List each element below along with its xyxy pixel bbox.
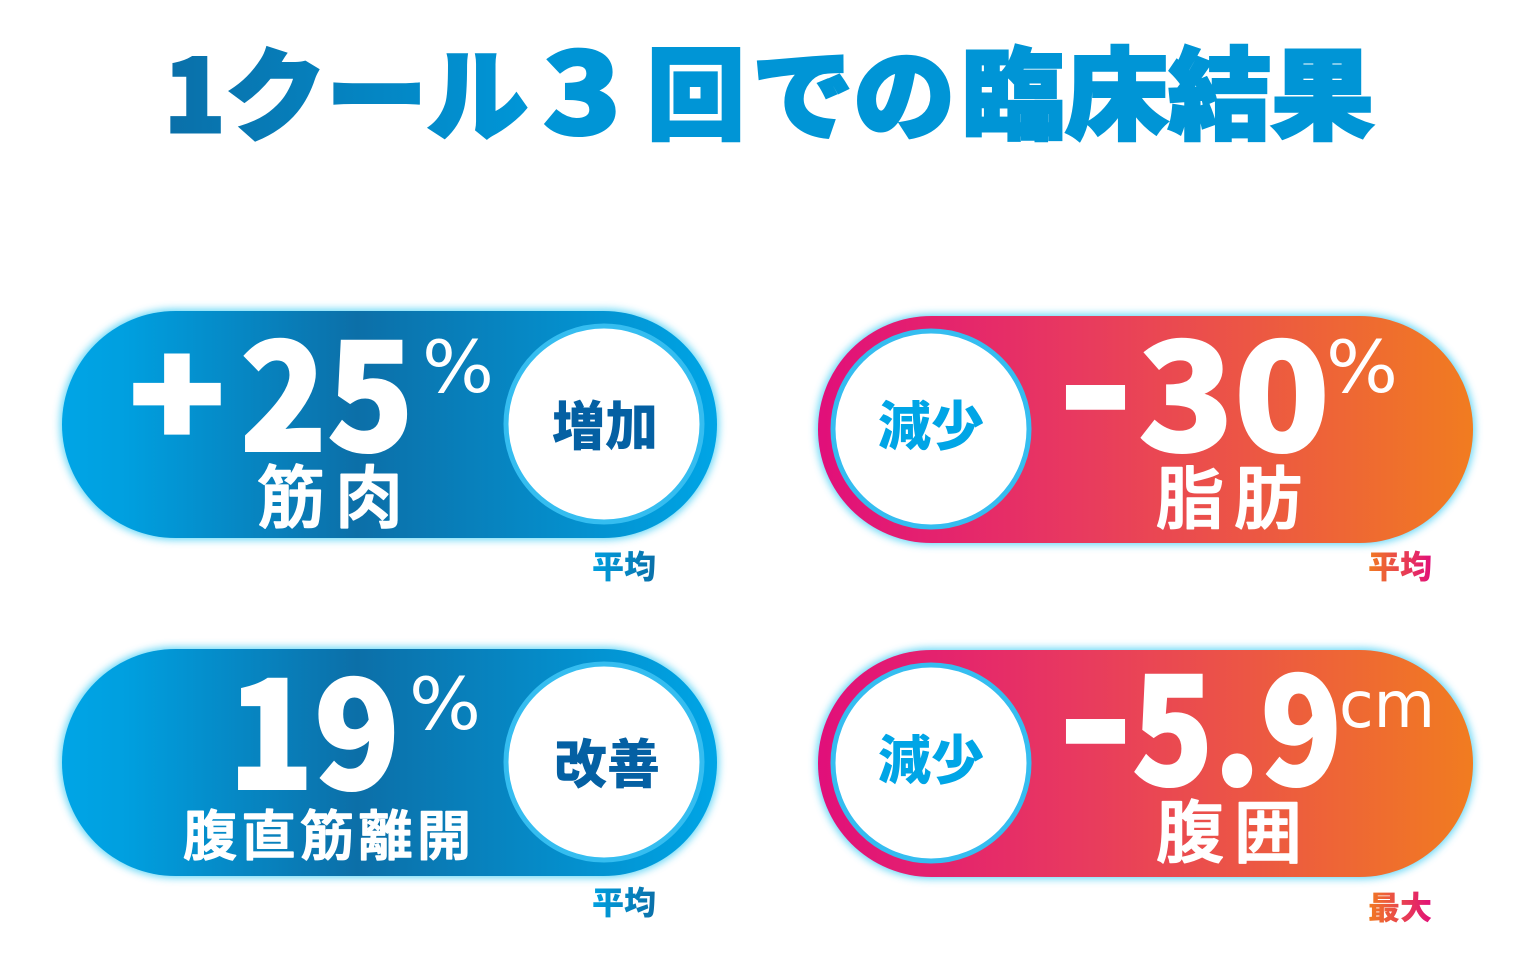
value: -5.9: − [1064, 615, 1127, 832]
value: +25: + [130, 286, 224, 488]
unit: percent: % [422, 325, 494, 409]
circle badge: improvement [506, 664, 702, 860]
label: diastasis recti: 腹直筋離開 [183, 792, 471, 871]
value: +25: 25 [240, 279, 414, 494]
label: muscle: 筋肉 [257, 443, 403, 542]
circle badge: increase: 増加 [552, 398, 658, 457]
circle badge: decrease [833, 665, 1029, 861]
unit: cm: cm [1339, 669, 1435, 743]
note: average: 平均 [1368, 549, 1432, 585]
value: -30 [1064, 279, 1330, 498]
value: 19: 19 [228, 617, 400, 832]
circle badge: decrease: 減少 [878, 398, 984, 457]
unit: percent: % [1326, 325, 1398, 409]
title: 1クール [164, 16, 528, 161]
unit: percent: % [409, 662, 481, 746]
label: fat: 脂肪 [1156, 444, 1302, 543]
circle badge: decrease: 減少 [878, 732, 984, 791]
circle badge: improvement: 改善 [554, 736, 660, 795]
note: average: 平均 [592, 885, 656, 921]
panel: fat decrease [816, 279, 1475, 545]
panel: diastasis recti improvement [60, 617, 719, 878]
title: での [752, 16, 955, 161]
circle badge: decrease [833, 331, 1029, 527]
label: waist: 腹囲 [1156, 778, 1302, 877]
value: -5.9: 5.9 [1132, 613, 1342, 828]
title [164, 5, 1374, 167]
value: +25 [130, 279, 414, 494]
note: average: 平均 [592, 549, 656, 585]
panel: muscle increase [60, 279, 719, 542]
panel: waist decrease [816, 613, 1475, 879]
value: -30: − [1064, 281, 1127, 498]
title: 回 [647, 15, 745, 160]
value: -30: 30 [1138, 279, 1330, 494]
title: 臨床結果 [962, 15, 1374, 160]
title: 3 [543, 5, 621, 167]
circle badge: increase [506, 326, 702, 522]
note: maximum: 最大 [1368, 890, 1432, 926]
value: -5.9 [1064, 613, 1342, 832]
